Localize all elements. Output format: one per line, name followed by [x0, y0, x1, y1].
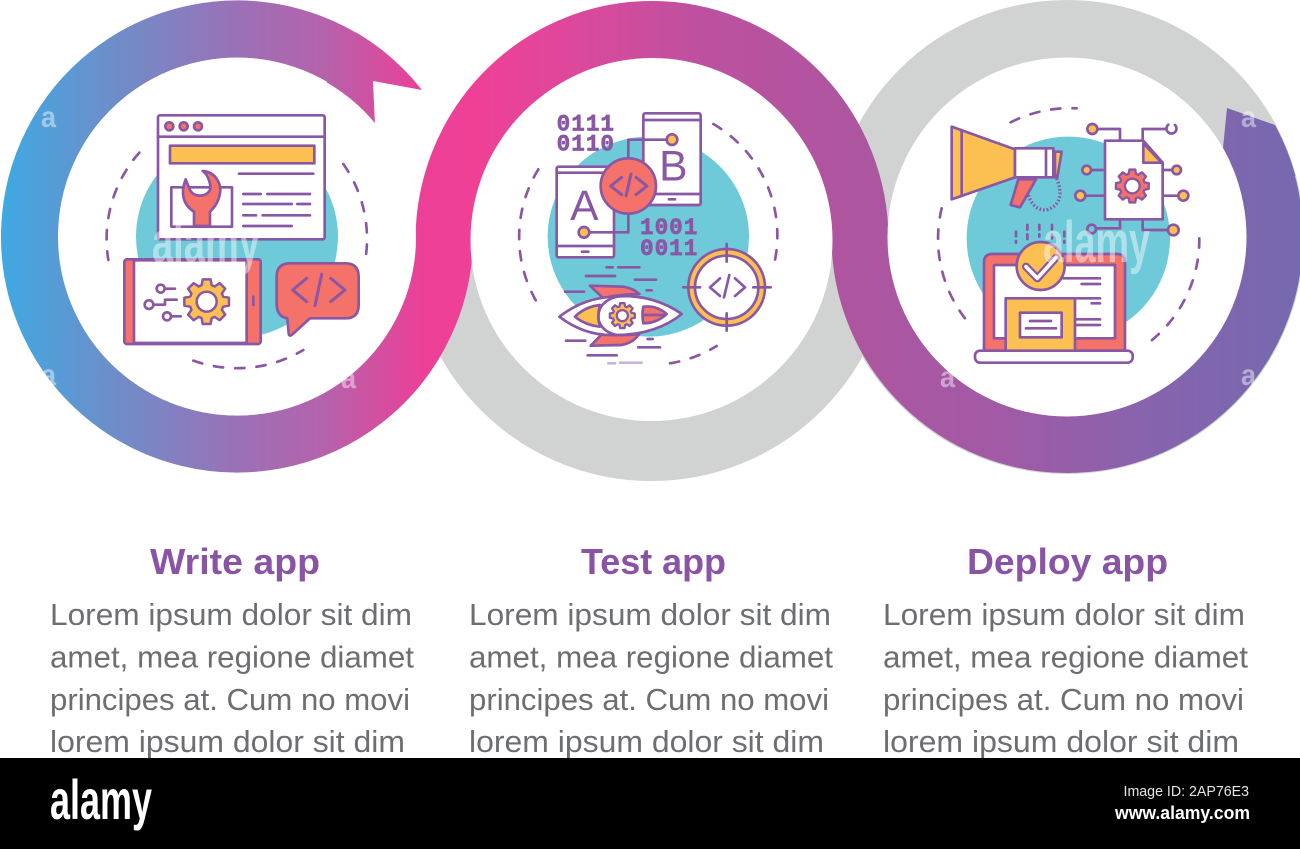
binary digits: [557, 112, 697, 262]
website: www.alamy.com: [1114, 803, 1250, 823]
gray ring: step 2: [412, 242, 862, 481]
body: test app: lorem ipsum dolor sit dim: [469, 724, 824, 759]
notched end: ribbon finish: [1223, 108, 1296, 190]
phone B: [628, 113, 701, 205]
gray ring: step 3: [860, 30, 1274, 444]
image id: Image ID: 2AP76E3: [1124, 783, 1249, 800]
panel: test app text: [469, 541, 833, 759]
body: test app: Lorem ipsum dolor sit dim: [469, 597, 831, 632]
body: write app: [50, 597, 414, 759]
binary digits: 1001: [640, 215, 697, 241]
binary digits: 0110: [557, 131, 614, 157]
icon: deploy app: [938, 108, 1199, 363]
teal backdrop: [967, 137, 1170, 340]
body: deploy app: principes at. Cum no movi: [883, 682, 1244, 717]
falling dashes: [1016, 225, 1064, 243]
watermarks: alamy: [152, 210, 260, 275]
binary digits: 0111: [557, 112, 614, 138]
icon: write app: [107, 115, 367, 368]
rocket: [559, 286, 682, 346]
footer bar: [0, 758, 1300, 849]
watermarks: a: [940, 361, 955, 394]
dashed orbit: [938, 108, 1199, 347]
body: deploy app: Lorem ipsum dolor sit dim: [883, 597, 1245, 632]
white disc: step 3: [888, 58, 1246, 416]
check badge: [1017, 242, 1065, 290]
gradient ribbon: [30, 29, 1296, 445]
teal backdrop: [136, 136, 338, 338]
panel: deploy app text: [883, 541, 1248, 759]
megaphone: [952, 127, 1062, 210]
body: test app: [469, 597, 833, 759]
target with code: [683, 244, 771, 331]
body: write app: principes at. Cum no movi: [50, 682, 410, 717]
watermarks: alamy: [1043, 210, 1150, 275]
body: deploy app: amet, mea regione diamet: [883, 640, 1248, 674]
speech bubble with code: [277, 263, 359, 336]
heading: deploy app: Deploy app: [967, 541, 1168, 582]
footer logo: alamy: [50, 768, 152, 831]
faded speed lines: [608, 359, 642, 367]
binary digits: 0011: [640, 236, 697, 262]
body: write app: Lorem ipsum dolor sit dim: [50, 597, 412, 632]
faint watermark over body text: a: [882, 608, 943, 660]
speed lines: [565, 267, 660, 355]
watermarks: a: [1241, 359, 1256, 392]
panel: write app text: [50, 541, 414, 759]
heading: write app: Write app: [150, 541, 320, 582]
white disc: step 1: [59, 58, 416, 416]
faint watermark over body text: a: [48, 608, 109, 660]
browser window: [158, 115, 325, 239]
icon: test app: [519, 112, 777, 363]
document with circuit: [1075, 124, 1188, 235]
heading: test app: Test app: [581, 541, 726, 582]
dashed orbit: [107, 153, 367, 368]
watermarks: a: [341, 362, 356, 395]
phone A: [557, 167, 628, 257]
body: deploy app: [883, 597, 1248, 759]
phone A: A: [570, 182, 599, 230]
watermarks: a: [41, 101, 56, 134]
body: deploy app: lorem ipsum dolor sit dim: [883, 724, 1239, 759]
body: write app: lorem ipsum dolor sit dim: [50, 724, 405, 759]
watermarks: [41, 101, 1256, 395]
teal backdrop: [548, 137, 749, 337]
body: test app: amet, mea regione diamet: [469, 640, 833, 674]
laptop: [975, 254, 1133, 363]
faint watermark over body text: [48, 608, 943, 660]
watermarks: a: [1241, 101, 1256, 134]
phone B: B: [659, 143, 688, 191]
arrow head: ribbon start: [326, 32, 422, 125]
watermarks: a: [41, 359, 56, 392]
code badge: [601, 158, 656, 214]
body: test app: principes at. Cum no movi: [469, 682, 829, 717]
body: write app: amet, mea regione diamet: [50, 640, 414, 674]
dashed orbit: [519, 124, 777, 363]
tablet with gear: [124, 259, 261, 344]
white disc: step 2: [470, 59, 832, 421]
